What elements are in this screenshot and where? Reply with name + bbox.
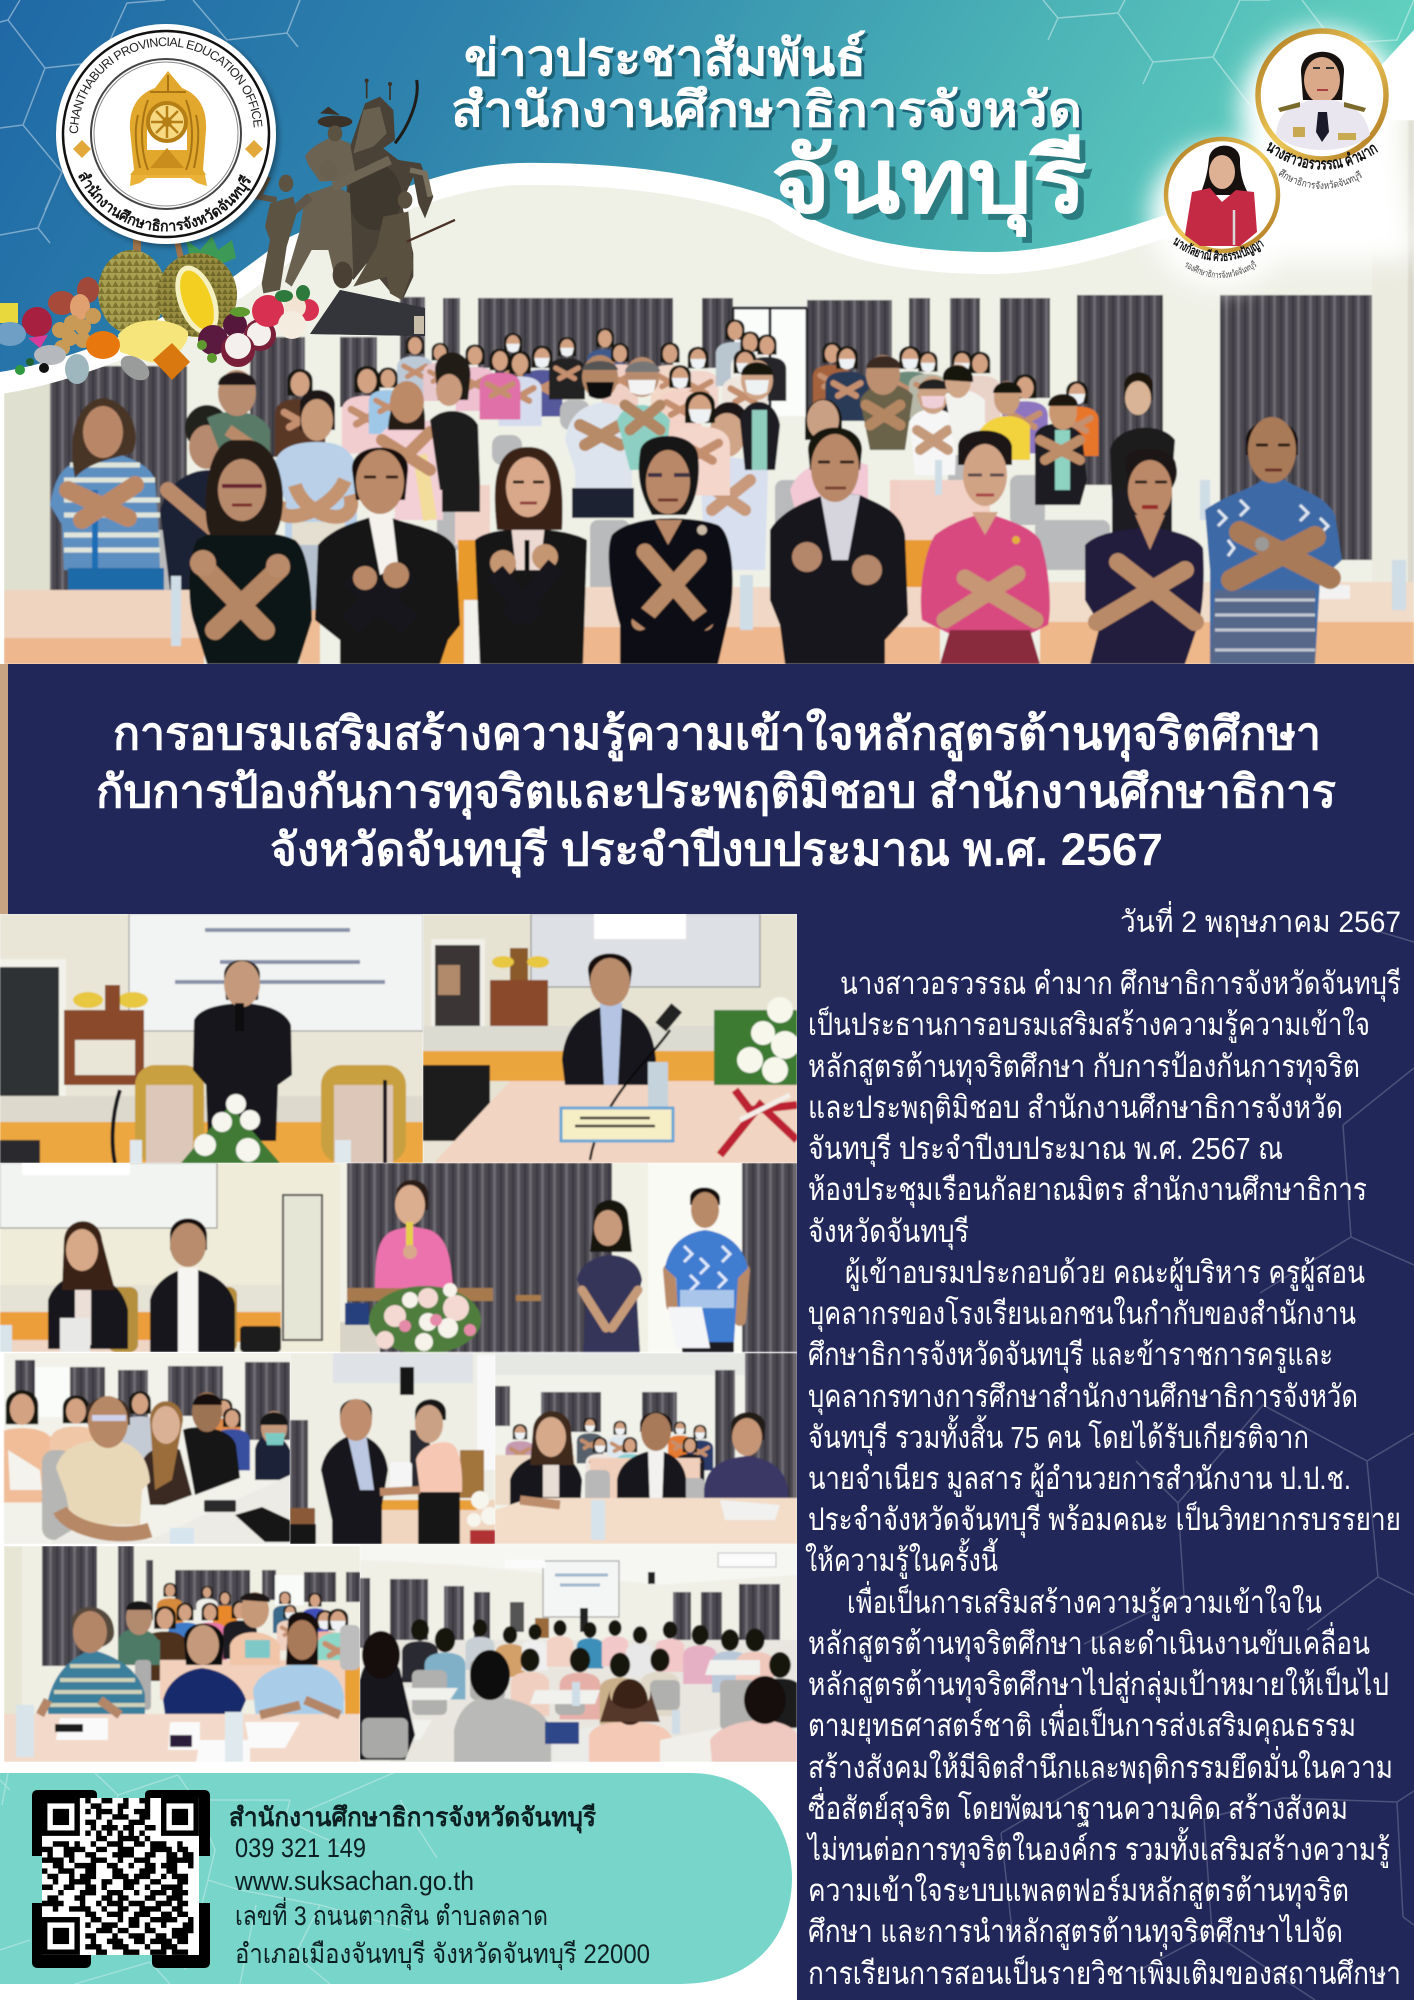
title text: การอบรมเสริมสร้างความรู้ความเข้าใจหลักสูตรต้านทุจริตศึกษา <box>113 707 1321 762</box>
right soldier <box>353 212 413 300</box>
contact text: สำนักงานศึกษาธิการจังหวัดจันทบุรี <box>229 1802 596 1834</box>
title text: จังหวัดจันทบุรี ประจำปีงบประมาณ พ.ศ. 2567 <box>270 824 1163 878</box>
name sign <box>561 1108 673 1141</box>
portrait name: deputy <box>1173 238 1264 278</box>
article body text: จังหวัดจันทบุรี <box>808 1214 969 1251</box>
statue of King Taksin <box>258 79 455 336</box>
title text <box>96 707 1336 878</box>
portrait: deputy director <box>1166 139 1278 251</box>
standing hosts <box>577 1255 642 1352</box>
diamonds <box>73 140 263 158</box>
front row: man in black suit <box>315 448 460 664</box>
photo: gift presentation <box>290 1353 499 1544</box>
back rows of attendees <box>275 319 1099 456</box>
portrait name: deputy: นางกัลยาณี ศิวธรรมปัญญา <box>1173 238 1264 262</box>
logo: Chanthaburi Provincial Education Office: CHANTHABURI PROVINCIAL EDUCATION OFFICE <box>69 37 262 134</box>
front row: woman in black jacket <box>475 447 587 664</box>
photo: guest speaker at desk <box>423 914 799 1163</box>
fruit and gem cluster <box>0 228 319 385</box>
article body text <box>805 966 1401 1991</box>
article body text: เพื่อเป็นการเสริมสร้างความรู้ความเข้าใจใน <box>847 1581 1322 1621</box>
portrait name: director: ศึกษาธิการจังหวัดจันทบุรี <box>1278 169 1362 189</box>
photo: woman in pink at podium with two hosts <box>340 1163 797 1354</box>
header title lines: จันทบุรี <box>771 133 1087 238</box>
portrait name: director: นางสาวอรวรรณ คำมาก <box>1266 142 1378 170</box>
chairs and side tables <box>150 400 1110 595</box>
photo: moderators at table <box>0 1163 347 1352</box>
small water bottles <box>171 460 1406 646</box>
contact text: 039 321 149 <box>235 1833 366 1863</box>
logo: Chanthaburi Provincial Education Office <box>56 24 282 250</box>
desk <box>434 1081 797 1163</box>
rear tables with orange cloth <box>455 480 990 606</box>
article body text: ให้ความรู้ในครั้งนี้ <box>805 1538 998 1579</box>
front row: woman in pink dress <box>921 430 1050 664</box>
photo: three women at front table <box>4 1546 360 1762</box>
portrait: provincial education director <box>1258 31 1386 159</box>
second row attendees <box>50 352 1175 610</box>
left soldier <box>262 197 297 293</box>
gold chairs <box>135 1065 406 1163</box>
article body text: จันทบุรี ประจำปีงบประมาณ พ.ศ. 2567 ณ <box>808 1131 1283 1168</box>
date: วันที่ 2 พฤษภาคม 2567 <box>1120 901 1401 939</box>
header title lines: ข่าวประชาสัมพันธ์ <box>464 30 866 86</box>
table top <box>4 1714 360 1762</box>
photo: speaker woman at stage <box>0 914 423 1163</box>
contact text <box>229 1802 650 1971</box>
front row: woman in black blouse <box>609 436 733 664</box>
gold emblem <box>130 71 207 186</box>
front soldier <box>285 185 353 287</box>
logo: Chanthaburi Provincial Education Office: สำนักงานศึกษาธิการจังหวัดจันทบุรี <box>78 172 251 232</box>
news article panel <box>797 901 1414 2000</box>
contact text: www.suksachan.go.th <box>234 1866 474 1896</box>
front row: man in blue batik shirt <box>1205 417 1342 664</box>
QR code <box>32 1790 210 1968</box>
pedestal <box>310 290 425 336</box>
flowers and ribbon <box>714 1010 797 1085</box>
flowers <box>181 1105 280 1163</box>
title text: กับการป้องกันการทุจริตและประพฤติมิชอบ สำนักงานศึกษาธิการ <box>96 766 1336 820</box>
main group photo <box>4 120 1414 664</box>
white glow behind portraits <box>1150 28 1414 287</box>
rider <box>305 137 357 182</box>
contact text: เลขที่ 3 ถนนตากสิน ตำบลตลาด <box>235 1897 548 1931</box>
portrait name: deputy: รองศึกษาธิการจังหวัดจันทบุรี <box>1186 260 1256 278</box>
left edge strip of photo <box>0 664 8 914</box>
portrait name: director <box>1266 142 1378 189</box>
photo: wide view of the hall from behind <box>360 1544 802 1762</box>
horse <box>333 97 433 298</box>
front tables <box>4 582 1414 664</box>
front row: woman in lace dress <box>189 440 312 664</box>
title panel <box>8 664 1414 914</box>
front row: man in dark suit <box>770 428 908 664</box>
contact text: อำเภอเมืองจันทบุรี จังหวัดจันทบุรี 22000 <box>235 1939 650 1971</box>
article body text: จันทบุรี รวมทั้งสิ้น 75 คน โดยได้รับเกียรติจาก <box>808 1415 1309 1457</box>
curtains in the hall <box>50 295 1372 596</box>
white table and handbag <box>52 1475 290 1544</box>
front row: woman in navy lace dress <box>1085 449 1204 664</box>
header title lines: สำนักงานศึกษาธิการจังหวัด <box>451 84 1082 137</box>
header teal band with wave <box>0 0 1414 372</box>
photo: seated attendees with woman in beige <box>0 1353 290 1544</box>
footer contact pill <box>0 1770 792 1984</box>
hexagon lines <box>0 0 1414 243</box>
header title lines <box>451 30 1087 238</box>
photo: three attendees seated in hall <box>495 1353 797 1544</box>
podium flowers <box>369 1286 481 1354</box>
